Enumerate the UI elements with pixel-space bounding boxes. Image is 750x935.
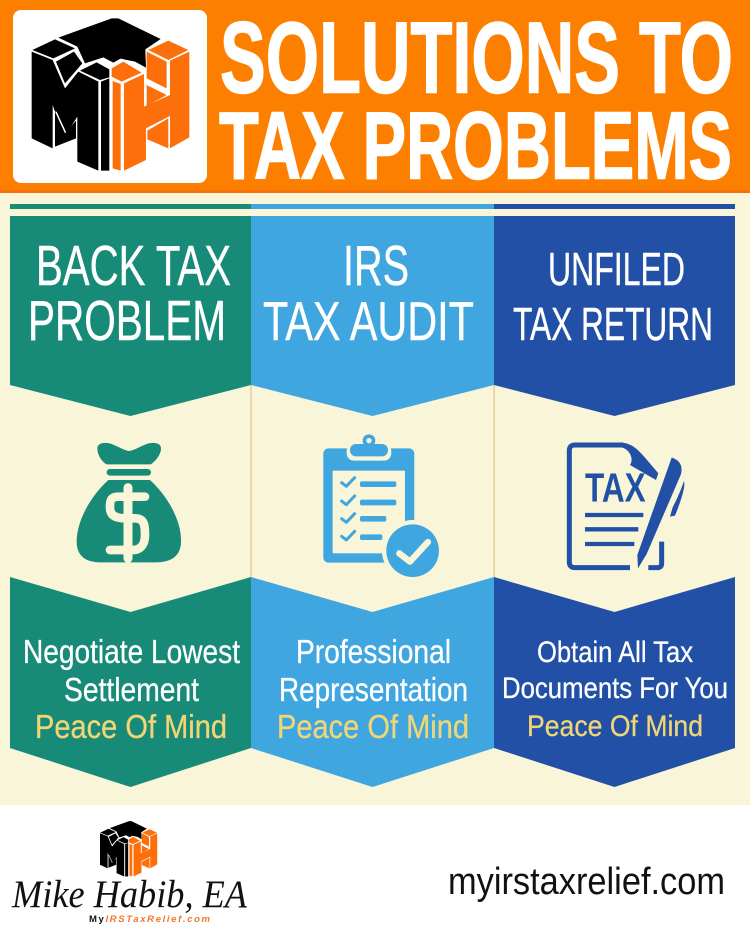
icon: clipboard with check	[323, 434, 443, 581]
panel: negotiate lowest settlement: Negotiate Lowest	[23, 633, 240, 670]
panel: obtain all tax documents	[494, 577, 735, 787]
banner: back tax problem	[10, 216, 251, 416]
banner: unfiled tax return	[494, 216, 735, 416]
banner: unfiled tax return: UNFILED	[548, 243, 685, 295]
header banner	[0, 0, 750, 200]
icon: tax document and pen	[569, 443, 684, 568]
small site label: MyIRSTaxRelief.com	[89, 914, 211, 925]
banner: back tax problem: PROBLEM	[28, 289, 226, 353]
column: back tax problem	[10, 204, 251, 787]
column: irs tax audit	[251, 204, 494, 787]
panel: professional representation: Peace Of Mind	[277, 708, 469, 745]
name: Mike Habib, EA	[11, 873, 247, 916]
banner: irs tax audit	[251, 216, 494, 416]
website address: myirstaxrelief.com	[448, 861, 725, 903]
small logo	[100, 821, 157, 876]
panel: obtain all tax documents: Obtain All Tax	[537, 636, 693, 669]
panel: negotiate lowest settlement: Peace Of Mind	[35, 708, 227, 745]
header logo	[13, 10, 207, 183]
column dividers	[250, 385, 495, 577]
title	[219, 2, 733, 200]
icon: tax document and pen: TAX	[585, 465, 646, 511]
banner: back tax problem: BACK TAX	[36, 234, 231, 298]
banner: irs tax audit: IRS	[343, 234, 409, 298]
footer signature logo	[11, 821, 247, 925]
panel: professional representation	[251, 577, 494, 787]
column: unfiled tax return	[494, 204, 735, 787]
cream content background	[0, 193, 750, 805]
banner: irs tax audit: TAX AUDIT	[263, 290, 474, 352]
panel: professional representation: Professional	[296, 633, 451, 670]
panel: negotiate lowest settlement: Settlement	[64, 671, 199, 708]
panel: negotiate lowest settlement	[10, 577, 251, 787]
icon: money bag	[77, 443, 181, 562]
panel: obtain all tax documents: Peace Of Mind	[527, 710, 703, 743]
panel: professional representation: Representation	[279, 671, 468, 708]
